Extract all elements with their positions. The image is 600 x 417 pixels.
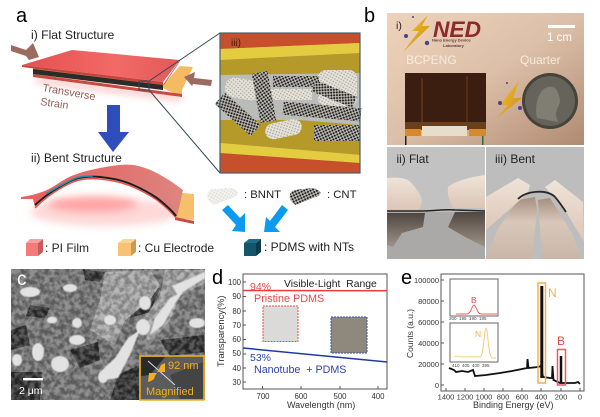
label: transverse strain [40, 82, 96, 112]
y axis tick labels: 100 [228, 278, 242, 287]
panel letter b: b [364, 5, 375, 27]
panel: d transparency chart [212, 267, 387, 410]
panel letter e: e [401, 267, 412, 289]
N peak highlight [538, 283, 546, 383]
y axis tick labels: 90 [232, 292, 242, 301]
y axis tick labels: 60 [232, 335, 242, 344]
scale bar: 1 cm [547, 25, 575, 44]
label: transverse strain: Transverse [41, 82, 96, 103]
x axis tick labels: 1000 [476, 392, 492, 402]
label: 94%: 94% [250, 281, 271, 293]
x axis title: Wavelength (nm) [287, 400, 355, 410]
y axis tick labels: 70 [232, 321, 242, 330]
legend: CNT: : CNT [327, 189, 357, 201]
x axis tick labels: 700 [256, 392, 270, 401]
y axis tick labels: 0 [435, 381, 439, 390]
panel: c SEM image [11, 269, 205, 400]
label: transverse strain: Strain [40, 96, 69, 112]
panel: a [11, 5, 361, 256]
panel letter a: a [16, 5, 28, 27]
text: i): i) [396, 20, 402, 32]
x axis tick labels [256, 392, 385, 401]
nanotubes [215, 70, 361, 141]
legend: PDMS with NTs [244, 239, 354, 256]
x axis tick labels: 800 [497, 392, 509, 402]
legend: Cu electrode [118, 239, 214, 256]
x axis tick labels: 1200 [457, 392, 473, 402]
label: nanotube + PDMS: Nanotube + PDMS [254, 364, 346, 376]
photo i: device and quarter [387, 13, 584, 145]
label: pristine PDMS: Pristine PDMS [254, 293, 324, 305]
SEM texture [11, 269, 205, 400]
inset: N spectrum [450, 323, 498, 368]
NED logo: NED [433, 17, 481, 42]
BCPENG device photo [405, 73, 486, 145]
scale bar: 1 cm: 1 cm [547, 32, 572, 44]
inset: B spectrum: B [471, 295, 477, 305]
panel letter d: d [212, 267, 223, 289]
y axis title: Transparency(%) [215, 295, 226, 367]
arrow: right compression [184, 72, 212, 86]
XPS spectrum [449, 286, 580, 384]
x axis tick labels: 500 [333, 392, 347, 401]
x axis tick labels [438, 392, 582, 402]
x axis tick labels: 400 [371, 392, 385, 401]
zoom box and leader lines [139, 33, 220, 173]
label: B: B [557, 334, 565, 348]
x axis tick labels: 600 [516, 392, 528, 402]
sample: pristine PDMS [263, 306, 298, 342]
magnified inset: 92 nm [168, 360, 199, 372]
label: BCPENG: BCPENG [406, 53, 457, 67]
B peak highlight [558, 350, 566, 385]
NED logo: Laboratory [443, 43, 465, 48]
x axis tick labels: 400 [535, 392, 547, 402]
label: visible-light range: Visible-Light Range [284, 279, 377, 290]
text: ii) Flat: ii) Flat [396, 152, 429, 166]
legend: PDMS with NTs: : PDMS with NTs [264, 240, 354, 254]
NED logo: Nano Energy Device [432, 38, 471, 42]
y axis tick labels: 40000 [418, 339, 439, 348]
plot frame and ticks [441, 274, 584, 391]
arrow: left compression [11, 43, 39, 60]
inset: B spectrum [449, 279, 498, 321]
x axis tick labels: 600 [294, 392, 308, 401]
NED logo [403, 15, 481, 52]
heading: flat structure: i) Flat Structure [31, 28, 115, 42]
photo ii: flat [387, 147, 485, 259]
inset label: iii) [231, 38, 241, 49]
label: N: N [548, 286, 557, 300]
y axis tick labels: 40 [232, 364, 242, 373]
y axis tick labels: 50 [232, 349, 242, 358]
legend: CNT [290, 188, 357, 205]
photo iii: bent [486, 147, 584, 259]
sample: nanotube PDMS [331, 317, 367, 353]
arrow: BNNT to PDMS [222, 205, 245, 232]
arrow: CNT to PDMS [264, 205, 288, 232]
text: iii) Bent: iii) Bent [495, 152, 536, 166]
line: pristine PDMS [243, 290, 387, 292]
scale bar: 2 μm [19, 378, 43, 397]
x axis tick labels: 0 [578, 392, 582, 402]
magnified inset: Magnified [146, 386, 194, 398]
flat structure device [22, 50, 193, 100]
legend: BNNT: : BNNT [244, 189, 281, 201]
inset iii: nanotube close-up [215, 33, 361, 173]
y axis tick labels: 20000 [418, 360, 439, 369]
y axis tick labels: 100000 [414, 276, 439, 285]
legend: BNNT [207, 188, 281, 205]
label: 53%: 53% [250, 352, 271, 364]
plot frame and axes [243, 274, 387, 389]
scale bar: 2 μm: 2 μm [19, 385, 43, 397]
legend: Cu electrode: : Cu Electrode [138, 241, 214, 255]
panel letter c: c [17, 269, 26, 290]
inset: N spectrum: 410 405 400 395 [452, 363, 490, 368]
x axis tick labels: 200 [555, 392, 567, 402]
y axis tick labels: 80000 [418, 297, 439, 306]
legend: PI film: : PI Film [45, 241, 89, 255]
label: Quarter: Quarter [520, 53, 561, 67]
x axis title: Binding Energy (eV) [473, 400, 554, 410]
legend: PI film [26, 239, 89, 256]
y axis tick labels: 60000 [418, 318, 439, 327]
y axis tick labels [228, 278, 242, 387]
panel: e XPS chart [401, 267, 584, 410]
inset: N spectrum: N [475, 329, 481, 339]
y axis tick labels: 30 [232, 378, 242, 387]
inset: B spectrum: 200 195 190 185 [449, 316, 487, 321]
heading: bent structure: ii) Bent Structure [31, 151, 122, 165]
panel: b [364, 5, 584, 259]
bent structure device [21, 165, 194, 226]
line: nanotube + PDMS [243, 348, 387, 362]
y axis tick labels: 80 [232, 307, 242, 316]
magnified inset [140, 356, 204, 400]
x axis tick labels: 1400 [438, 392, 454, 402]
quarter coin [497, 73, 578, 129]
y axis tick labels [414, 276, 439, 390]
y axis title: Counts (a.u.) [405, 309, 415, 358]
arrow: flat to bent [98, 105, 129, 152]
